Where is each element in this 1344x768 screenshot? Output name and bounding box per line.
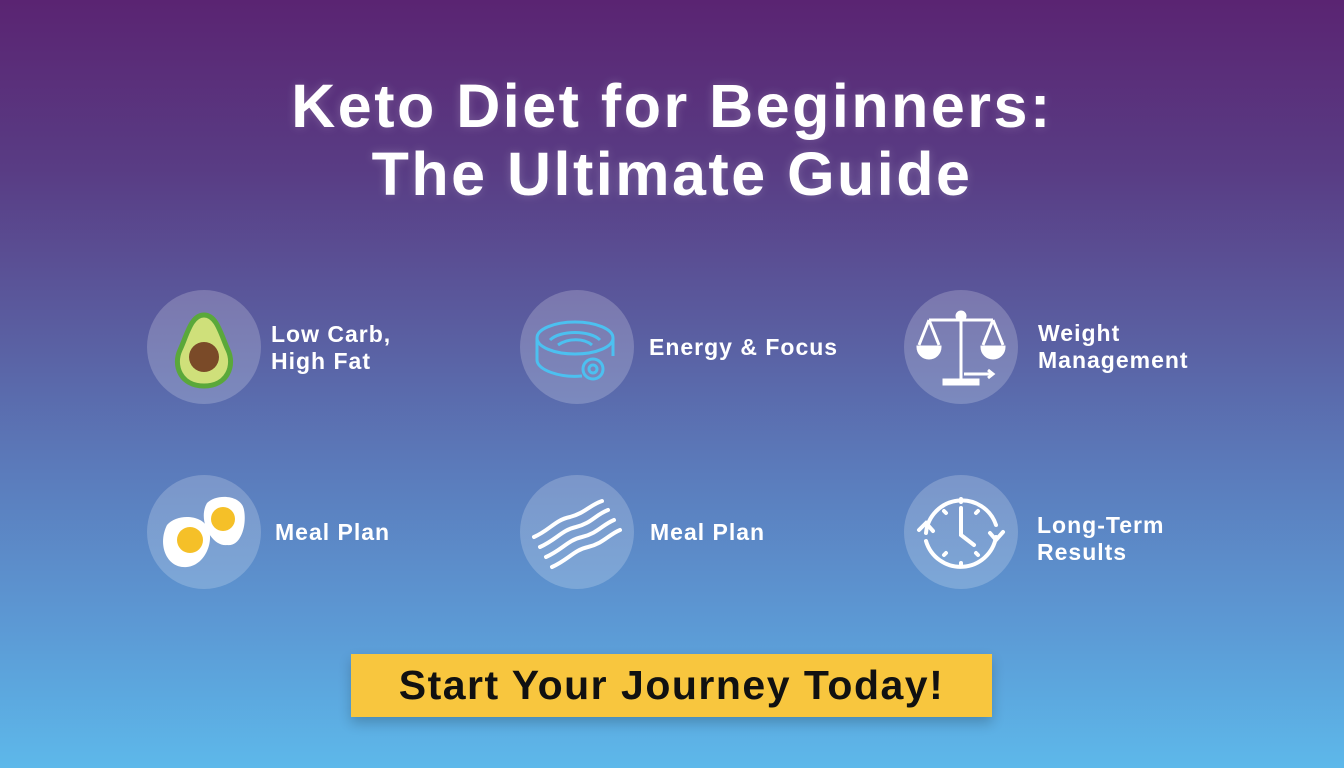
button: call to action: Start Your Journey Today!	[399, 662, 944, 708]
item: weight management	[904, 290, 1189, 404]
label: Meal Plan	[275, 519, 390, 545]
label: Weight	[1038, 320, 1120, 346]
icon: scale	[904, 290, 1018, 404]
button: call to action	[351, 654, 992, 717]
icon: bacon	[520, 475, 634, 589]
title: Keto Diet for Beginners:	[291, 72, 1053, 140]
label: Long-Term	[1037, 512, 1164, 538]
label	[1038, 320, 1189, 373]
item: long-term results	[904, 475, 1164, 589]
label	[1037, 512, 1164, 565]
label: High Fat	[271, 348, 371, 374]
item: meal plan bacon	[520, 475, 765, 589]
icon: eggs	[147, 475, 261, 589]
label: Low Carb,	[271, 321, 391, 347]
item: energy & focus	[520, 290, 838, 404]
icon: stadium gear	[520, 290, 634, 404]
icon: clock	[904, 475, 1018, 589]
item: low carb high fat	[147, 290, 391, 404]
title: The Ultimate Guide	[372, 140, 972, 208]
label: Results	[1037, 539, 1127, 565]
label: Meal Plan	[650, 519, 765, 545]
label	[271, 321, 391, 374]
item: meal plan eggs	[147, 475, 390, 589]
icon: avocado	[147, 290, 261, 404]
title	[291, 72, 1053, 208]
label: Management	[1038, 347, 1189, 373]
label: Energy & Focus	[649, 334, 838, 360]
